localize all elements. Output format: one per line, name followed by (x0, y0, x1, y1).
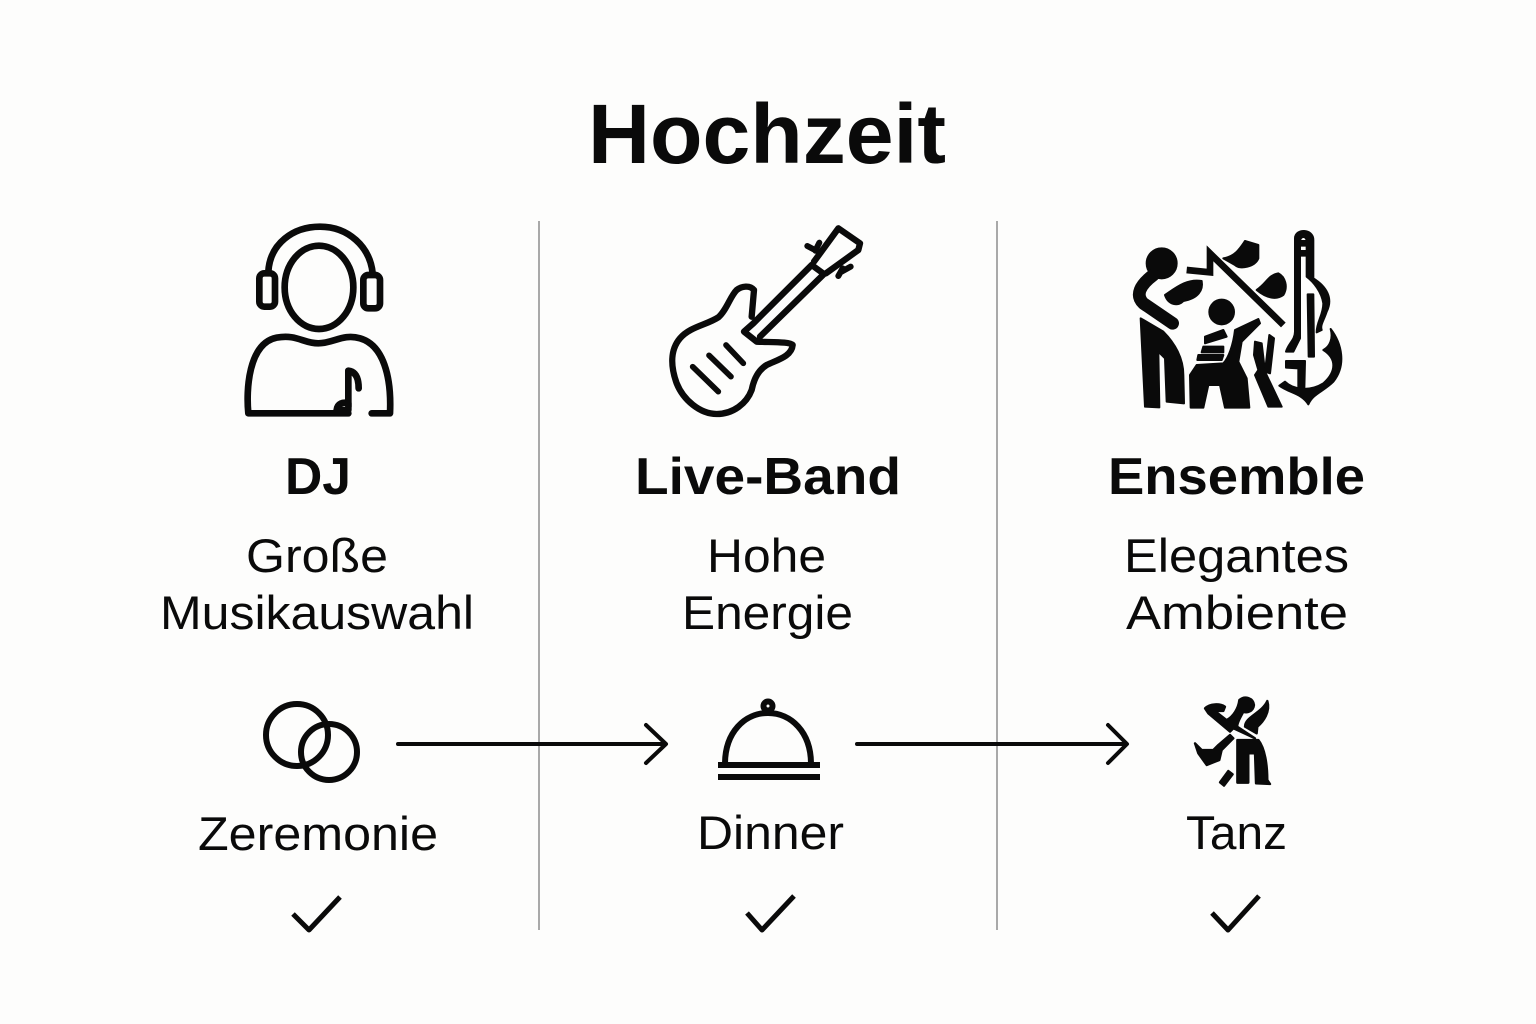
arrow: dinner to dance (857, 725, 1127, 763)
heading: Ensemble: Ensemble (1108, 448, 1365, 506)
arrow: ceremony to dinner (398, 725, 666, 763)
text: Ensemble description: Elegantes (1124, 529, 1349, 582)
text: DJ description: Musikauswahl (160, 586, 474, 639)
heading: Live-Band: Live-Band (635, 448, 901, 506)
text: Ensemble description (1124, 529, 1349, 639)
text: Live-Band description: Energie (682, 586, 853, 639)
icon: wedding rings (266, 704, 357, 780)
text: Live-Band description: Hohe (707, 529, 826, 582)
icon: dinner cloche (718, 702, 820, 777)
icon: check mark, Ensemble (1212, 896, 1259, 930)
icon: dancers (1195, 698, 1270, 786)
text: Live-Band description (682, 529, 853, 639)
icon: check mark, Live-Band (747, 896, 794, 930)
heading: DJ: DJ (285, 448, 351, 506)
icon: electric guitar (672, 228, 860, 414)
icon: check mark, DJ (293, 897, 340, 930)
label: Zeremonie: Zeremonie (198, 807, 438, 860)
icon: ensemble of musicians (1139, 231, 1341, 408)
title: Hochzeit (588, 87, 946, 181)
text: DJ description (160, 529, 474, 639)
label: Dinner: Dinner (697, 806, 844, 859)
text: Ensemble description: Ambiente (1126, 586, 1348, 639)
text: DJ description: Große (246, 529, 388, 582)
icon: DJ with headphones (248, 227, 390, 413)
label: Tanz: Tanz (1186, 806, 1287, 859)
